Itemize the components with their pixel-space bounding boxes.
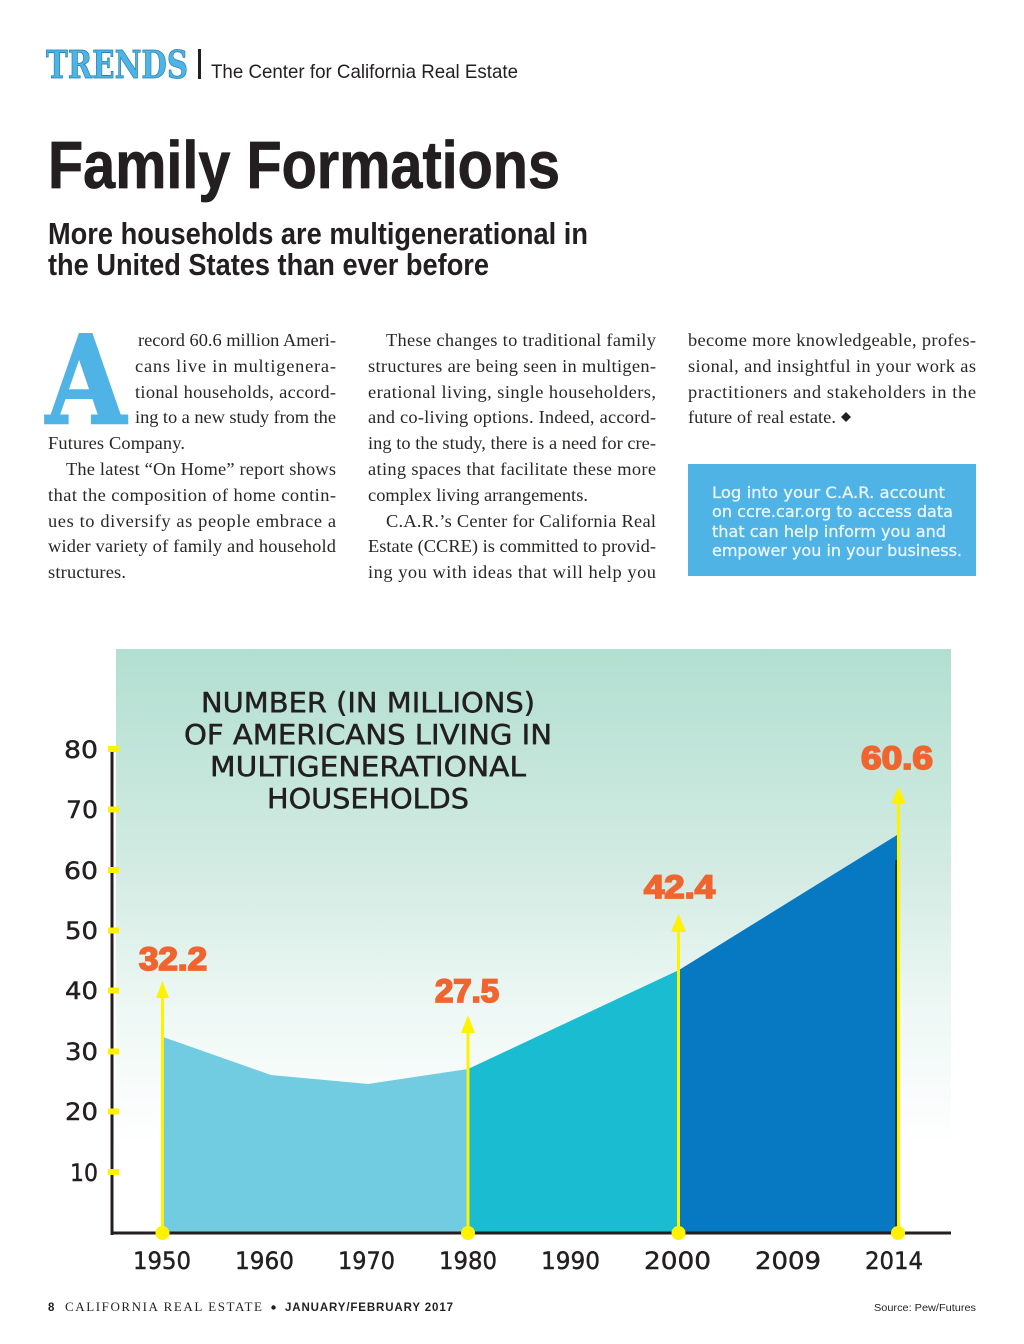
text column 3: practitioners and stakeholders in the [688, 382, 976, 402]
text column 1: wider variety of family and household [48, 536, 336, 556]
area chart [163, 835, 897, 1233]
callout: log in: on ccre.car.org to access data [712, 502, 953, 521]
x axis: 2014 [865, 1247, 923, 1275]
y axis: 20 [65, 1098, 98, 1126]
arrow: 1950 [156, 981, 170, 1240]
text column 1: Futures Company. [48, 433, 185, 453]
x axis: 2000 [644, 1247, 711, 1275]
callout: log in: Log into your C.A.R. account [712, 483, 945, 502]
y axis: 30 [65, 1038, 98, 1066]
arrow: 1980 [461, 1015, 475, 1240]
value label: 32.2: 32.2 [139, 941, 207, 977]
value label: 42.4: 42.4 [644, 869, 715, 905]
callout: log in: that can help inform you and [712, 522, 946, 541]
text column 1: structures. [48, 562, 126, 582]
text column 2: C.A.R.’s Center for California Real [386, 511, 656, 531]
callout: log in: empower you in your business. [712, 541, 962, 560]
value label: 27.5: 27.5 [435, 973, 499, 1009]
text column 2: complex living arrangements. [368, 485, 588, 505]
y axis: 50 [65, 917, 98, 945]
y axis: 70 [66, 796, 98, 824]
x axis [110, 1232, 951, 1275]
y axis: 80 [64, 736, 98, 764]
text column 3: become more knowledgeable, profes- [688, 330, 976, 350]
text column 1: record 60.6 million Ameri- [138, 330, 336, 350]
text column 1: tional households, accord- [135, 382, 336, 402]
chart title: OF AMERICANS LIVING IN [184, 718, 552, 751]
text column 1: The latest “On Home” report shows [66, 459, 336, 479]
text column 2: These changes to traditional family [386, 330, 657, 350]
text column 3: future of real estate. [688, 407, 836, 427]
x axis: 1990 [541, 1247, 600, 1275]
section label: TRENDS [46, 42, 518, 87]
chart title: HOUSEHOLDS [267, 782, 469, 815]
x axis: 2009 [755, 1247, 821, 1275]
x axis: 1970 [338, 1247, 395, 1275]
chart title: MULTIGENERATIONAL [210, 750, 526, 783]
subtitle [48, 216, 588, 282]
y axis: 40 [65, 977, 98, 1005]
text column 2: erational living, single householders, [368, 382, 656, 402]
value label: 60.6: 60.6 [861, 740, 933, 776]
chart panel background [116, 649, 951, 1233]
y axis: 60 [64, 857, 98, 885]
y axis: 10 [70, 1159, 98, 1187]
text column 1: cans live in multigenera- [135, 356, 336, 376]
x axis: 1950 [133, 1247, 191, 1275]
text column 2: and co-living options. Indeed, accord- [368, 407, 656, 427]
footer: page and issue [48, 1299, 453, 1314]
title: Family Formations [48, 128, 560, 203]
section label: TRENDS: TRENDS [46, 42, 188, 87]
subtitle: the United States than ever before [48, 247, 489, 282]
section label: TRENDS: The Center for California Real Estate [211, 61, 518, 83]
x axis: 1980 [439, 1247, 497, 1275]
text column 1: that the composition of home contin- [48, 485, 336, 505]
text column 1: ues to diversify as people embrace a [48, 511, 336, 531]
arrow: 2014 [891, 787, 906, 1240]
x axis: 1960 [235, 1247, 294, 1275]
drop cap: A [45, 308, 128, 452]
footer: page and issue: 8 [48, 1302, 55, 1314]
chart title: NUMBER (IN MILLIONS) [201, 686, 535, 719]
footer: page and issue: CALIFORNIA REAL ESTATE [65, 1299, 262, 1314]
text column 3 [688, 330, 976, 427]
text column 2: ating spaces that facilitate these more [368, 459, 656, 479]
text column 1 [48, 330, 336, 582]
text column 2: structures are being seen in multigen- [368, 356, 656, 376]
text column 2: ing you with ideas that will help you [368, 562, 656, 582]
subtitle: More households are multigenerational in [48, 216, 588, 251]
text column 2 [368, 330, 657, 582]
source note: Source: Pew/Futures [874, 1302, 976, 1314]
callout: log in [688, 464, 976, 576]
chart title [184, 686, 552, 815]
arrow: 2000 [671, 914, 686, 1240]
y axis [64, 736, 119, 1235]
text column 2: Estate (CCRE) is committed to provid- [368, 536, 656, 557]
text column 2: ing to the study, there is a need for cre- [368, 433, 656, 453]
text column 3: sional, and insightful in your work as [688, 356, 976, 376]
footer: page and issue: JANUARY/FEBRUARY 2017 [285, 1302, 453, 1314]
text column 1: ing to a new study from the [135, 407, 336, 427]
